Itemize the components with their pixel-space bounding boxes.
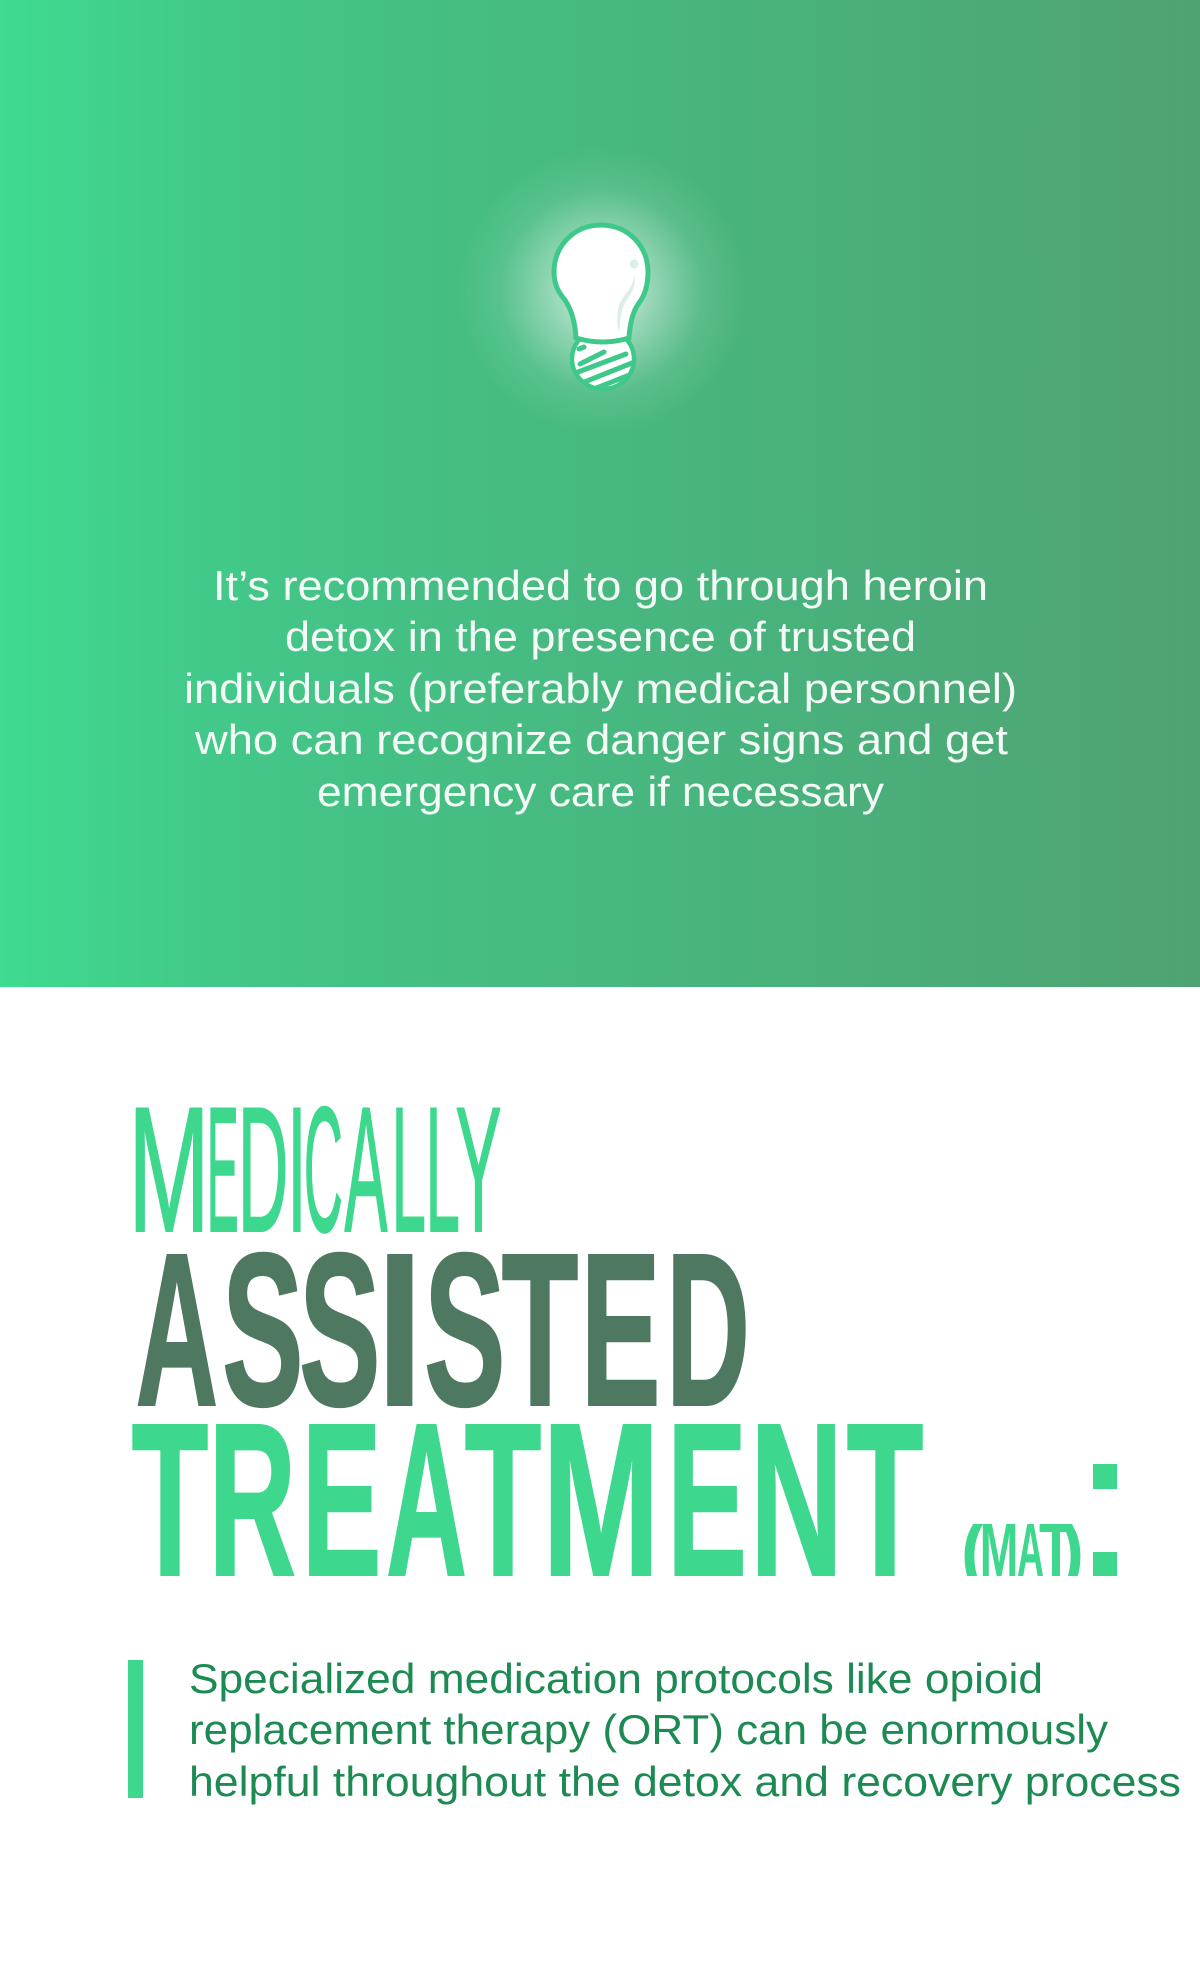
text block: MAT description: Specialized medication protocols like opioid [189,1655,1043,1702]
heading word: Treatment: M [542,1379,660,1622]
heading abbreviation: (MAT) [964,1524,1080,1576]
heading abbreviation: (MAT): ( [961,1508,986,1593]
heading word: Treatment: T [846,1379,924,1622]
heading abbreviation: (MAT): ) [1060,1508,1084,1593]
heading word: Treatment: R [208,1379,296,1622]
heading word: Treatment: T [132,1379,208,1622]
heading word: Assisted: S [299,1209,381,1452]
text block: detox recommendation: who can recognize danger signs and get [194,716,1008,763]
text block: detox recommendation [184,562,1017,815]
text block: MAT description: helpful throughout the detox and recovery process [189,1758,1181,1805]
accent bar [128,1660,143,1798]
heading: Medically Assisted Treatment (MAT) [132,1106,1117,1576]
heading word: Medically: C [304,1070,343,1269]
heading word: Assisted: S [424,1209,506,1452]
heading word: Medically: A [344,1070,388,1269]
heading: Medically Assisted Treatment (MAT): Y [456,1070,502,1269]
heading word: Medically: D [238,1070,288,1269]
heading word: Treatment: A [386,1379,467,1622]
heading word: Medically: M [128,1070,210,1269]
heading word: Assisted: T [502,1209,578,1452]
panel: green gradient banner [0,0,1200,987]
text block: detox recommendation: emergency care if necessary [317,768,884,815]
heading word: Assisted: S [222,1209,304,1452]
heading word: Medically: L [426,1070,460,1269]
heading word: Assisted: D [666,1209,750,1452]
heading word: Treatment: N [750,1379,843,1622]
text block: detox recommendation: individuals (preferably medical personnel) [184,665,1017,712]
heading word: Assisted: E [581,1209,661,1452]
heading word: Assisted: A [136,1209,218,1452]
heading word: Treatment: E [302,1379,382,1622]
text block: MAT description: replacement therapy (ORT) can be enormously [189,1706,1108,1753]
icon: glowing light bulb [477,166,727,416]
text block: detox recommendation: It’s recommended to go through heroin [213,562,988,609]
heading word: Treatment: E [667,1379,747,1622]
text block: detox recommendation: detox in the presence of trusted [285,613,916,660]
heading abbreviation: (MAT): T [1039,1508,1073,1593]
heading word: Medically: L [392,1070,426,1269]
heading word: Assisted: I [377,1209,423,1452]
heading word: Medically: E [207,1070,239,1269]
heading abbreviation: (MAT): A [1017,1508,1044,1593]
text block: MAT description [189,1655,1181,1805]
heading abbreviation: (MAT): M [980,1508,1018,1593]
heading word: Medically: I [287,1070,307,1269]
heading word: Treatment: T [464,1379,542,1622]
heading colon [1093,1464,1117,1576]
